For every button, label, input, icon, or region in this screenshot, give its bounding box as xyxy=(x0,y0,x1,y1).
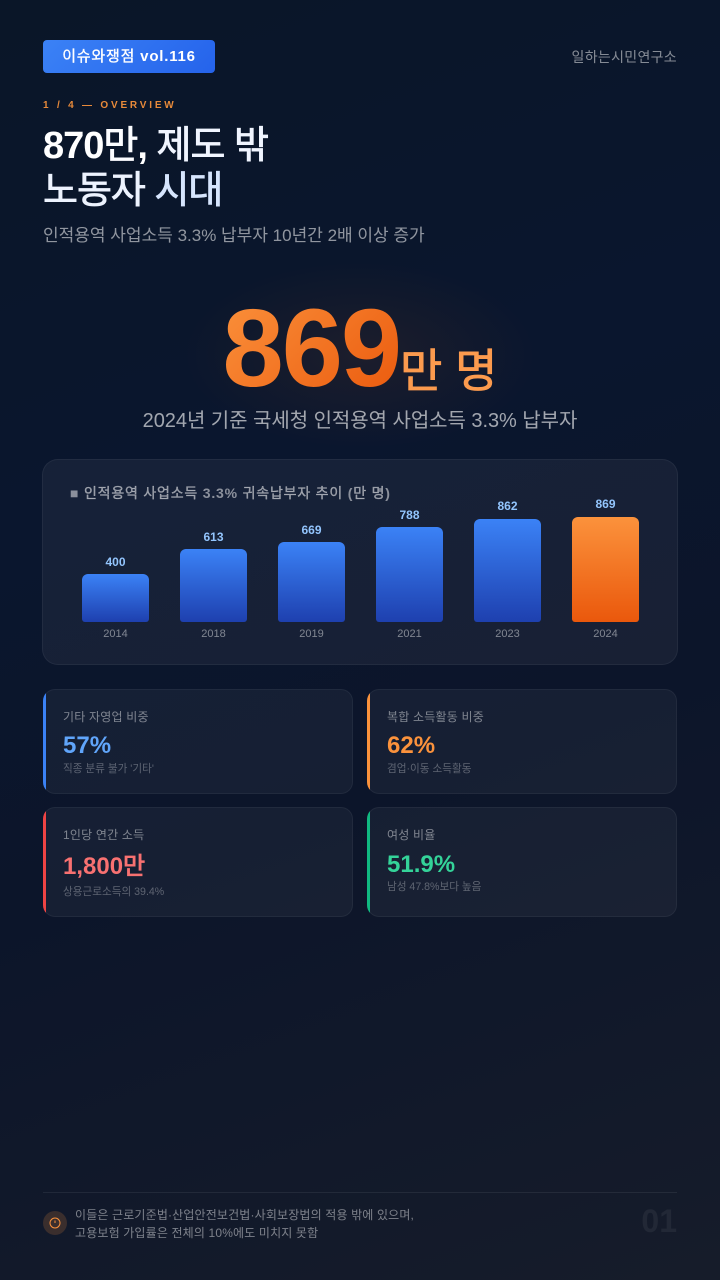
card note: 겸업·이동 소득활동 xyxy=(387,763,471,775)
bar 2023 xyxy=(474,499,541,640)
bar 2024: 2024 xyxy=(593,628,618,640)
panel: bar chart xyxy=(42,459,678,665)
card value: 51.9% xyxy=(387,851,455,878)
bar 2021: 2021 xyxy=(397,628,422,640)
panel: annual income xyxy=(43,807,353,917)
bar 2023: 862 xyxy=(497,499,518,513)
series badge: 이슈와쟁점 vol.116 xyxy=(62,48,196,65)
footer note: 이들은 근로기준법·산업안전보건법·사회보장법의 적용 밖에 있으며, xyxy=(75,1208,414,1222)
bar 2024 xyxy=(572,497,639,640)
bar 2014 xyxy=(82,555,149,640)
bar 2019 xyxy=(278,523,345,640)
overview label: 1 / 4 — OVERVIEW xyxy=(43,100,177,111)
bar 2024: 869 xyxy=(595,497,616,511)
subtitle: 인적용역 사업소득 3.3% 납부자 10년간 2배 이상 증가 xyxy=(43,226,425,245)
bar 2014: 2014 xyxy=(103,628,128,640)
card label: 1인당 연간 소득 xyxy=(63,828,144,842)
bar 2021: 788 xyxy=(399,508,420,522)
card note: 직종 분류 불가 '기타' xyxy=(63,763,154,775)
title: 노동자 시대 xyxy=(43,170,222,212)
hero figure: 869만 명 xyxy=(223,287,497,410)
series badge xyxy=(43,40,215,73)
card label: 여성 비율 xyxy=(387,828,436,842)
organization name: 일하는시민연구소 xyxy=(572,49,677,65)
chart heading: ■ 인적용역 사업소득 3.3% 귀속납부자 추이 (만 명) xyxy=(70,485,391,501)
page number: 01 xyxy=(641,1203,677,1239)
bar 2021 xyxy=(376,508,443,640)
card note: 상용근로소득의 39.4% xyxy=(63,886,164,898)
bar chart xyxy=(82,497,639,640)
card label: 복합 소득활동 비중 xyxy=(387,710,484,724)
bar 2014: 400 xyxy=(105,555,126,569)
panel: female share xyxy=(367,807,677,917)
icon: alert circle xyxy=(43,1211,67,1235)
card value: 1,800만 xyxy=(63,853,145,880)
card value: 62% xyxy=(387,732,435,759)
card label: 기타 자영업 비중 xyxy=(63,710,149,724)
hero caption: 2024년 기준 국세청 인적용역 사업소득 3.3% 납부자 xyxy=(143,410,577,432)
bar 2023: 2023 xyxy=(495,628,520,640)
title: 870만, 제도 밖 xyxy=(43,125,268,167)
bar 2018: 2018 xyxy=(201,628,226,640)
bar 2018 xyxy=(180,530,247,640)
footer note: 고용보험 가입률은 전체의 10%에도 미치지 못함 xyxy=(75,1226,318,1240)
bar 2019: 669 xyxy=(301,523,322,537)
bar 2019: 2019 xyxy=(299,628,324,640)
footer rule xyxy=(43,1192,677,1193)
bar 2018: 613 xyxy=(203,530,224,544)
card value: 57% xyxy=(63,732,111,759)
title xyxy=(43,125,268,212)
panel: other self-employed share xyxy=(43,689,353,794)
card note: 남성 47.8%보다 높음 xyxy=(387,881,481,893)
panel: multiple income share xyxy=(367,689,677,794)
footer note xyxy=(75,1208,414,1240)
